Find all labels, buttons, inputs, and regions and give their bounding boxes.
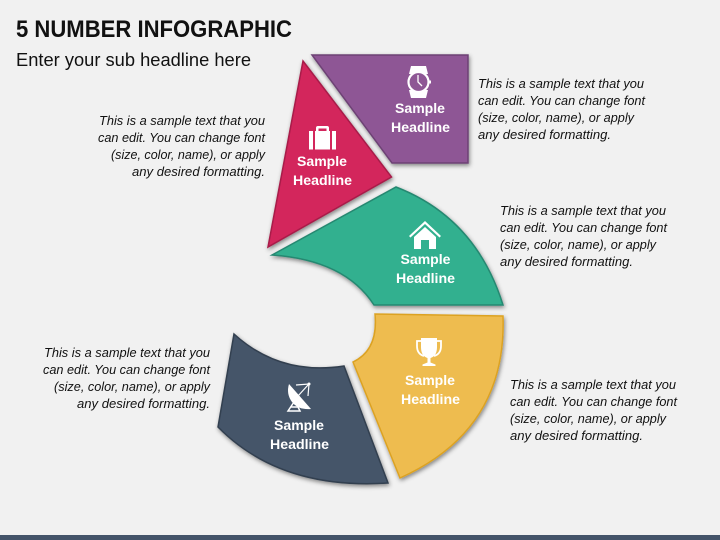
text block: green: can edit. You can change font [500, 221, 668, 235]
text block: green: any desired formatting. [500, 255, 633, 269]
heading: green: Sample [400, 251, 451, 267]
text block: purple: can edit. You can change font [478, 94, 646, 108]
panel: yellow segment [353, 314, 503, 478]
text block: navy [43, 346, 211, 411]
text block: crimson: (size, color, name), or apply [111, 148, 266, 162]
heading: yellow: Sample [405, 372, 455, 388]
heading: purple: Sample [395, 100, 445, 116]
text block: crimson: any desired formatting. [132, 165, 265, 179]
text block: navy: can edit. You can change font [43, 363, 211, 377]
text block: green: (size, color, name), or apply [500, 238, 657, 252]
heading: crimson: Headline [293, 172, 352, 188]
text block: green: This is a sample text that you [500, 204, 666, 218]
text block: purple [478, 77, 646, 142]
icon: briefcase [309, 126, 336, 150]
text block: crimson: can edit. You can change font [98, 131, 266, 145]
icon: house [409, 221, 441, 249]
footer bar [0, 535, 720, 540]
text block: purple: This is a sample text that you [478, 77, 644, 91]
subtitle: Enter your sub headline here [16, 50, 251, 70]
text block: yellow: can edit. You can change font [510, 395, 678, 409]
heading: green: Headline [396, 270, 455, 286]
heading: navy: Headline [270, 436, 329, 452]
heading: yellow [401, 372, 460, 407]
heading: yellow: Headline [401, 391, 460, 407]
text block: yellow: any desired formatting. [510, 429, 643, 443]
text block: navy: any desired formatting. [77, 397, 210, 411]
icon: trophy [417, 338, 441, 366]
heading: navy: Sample [274, 417, 324, 433]
text block: crimson [98, 114, 266, 179]
text block: purple: (size, color, name), or apply [478, 111, 635, 125]
panel: purple segment [312, 55, 468, 163]
heading: purple [391, 100, 450, 135]
heading: crimson [293, 153, 352, 188]
heading: purple: Headline [391, 119, 450, 135]
heading: navy [270, 417, 329, 452]
text block: navy: (size, color, name), or apply [54, 380, 211, 394]
text block: yellow: This is a sample text that you [510, 378, 676, 392]
text block: crimson: This is a sample text that you [99, 114, 265, 128]
panel: navy segment [218, 334, 388, 484]
text block: navy: This is a sample text that you [44, 346, 210, 360]
icon: satellite dish [288, 382, 311, 411]
text block: yellow [510, 378, 678, 443]
heading: green [396, 251, 455, 286]
text block: green [500, 204, 668, 269]
text block: purple: any desired formatting. [478, 128, 611, 142]
title: 5 NUMBER INFOGRAPHIC [16, 16, 292, 43]
heading: crimson: Sample [297, 153, 347, 169]
panel: crimson segment [268, 61, 392, 247]
panel: green segment [272, 187, 503, 305]
icon: watch [408, 66, 431, 98]
text block: yellow: (size, color, name), or apply [510, 412, 667, 426]
